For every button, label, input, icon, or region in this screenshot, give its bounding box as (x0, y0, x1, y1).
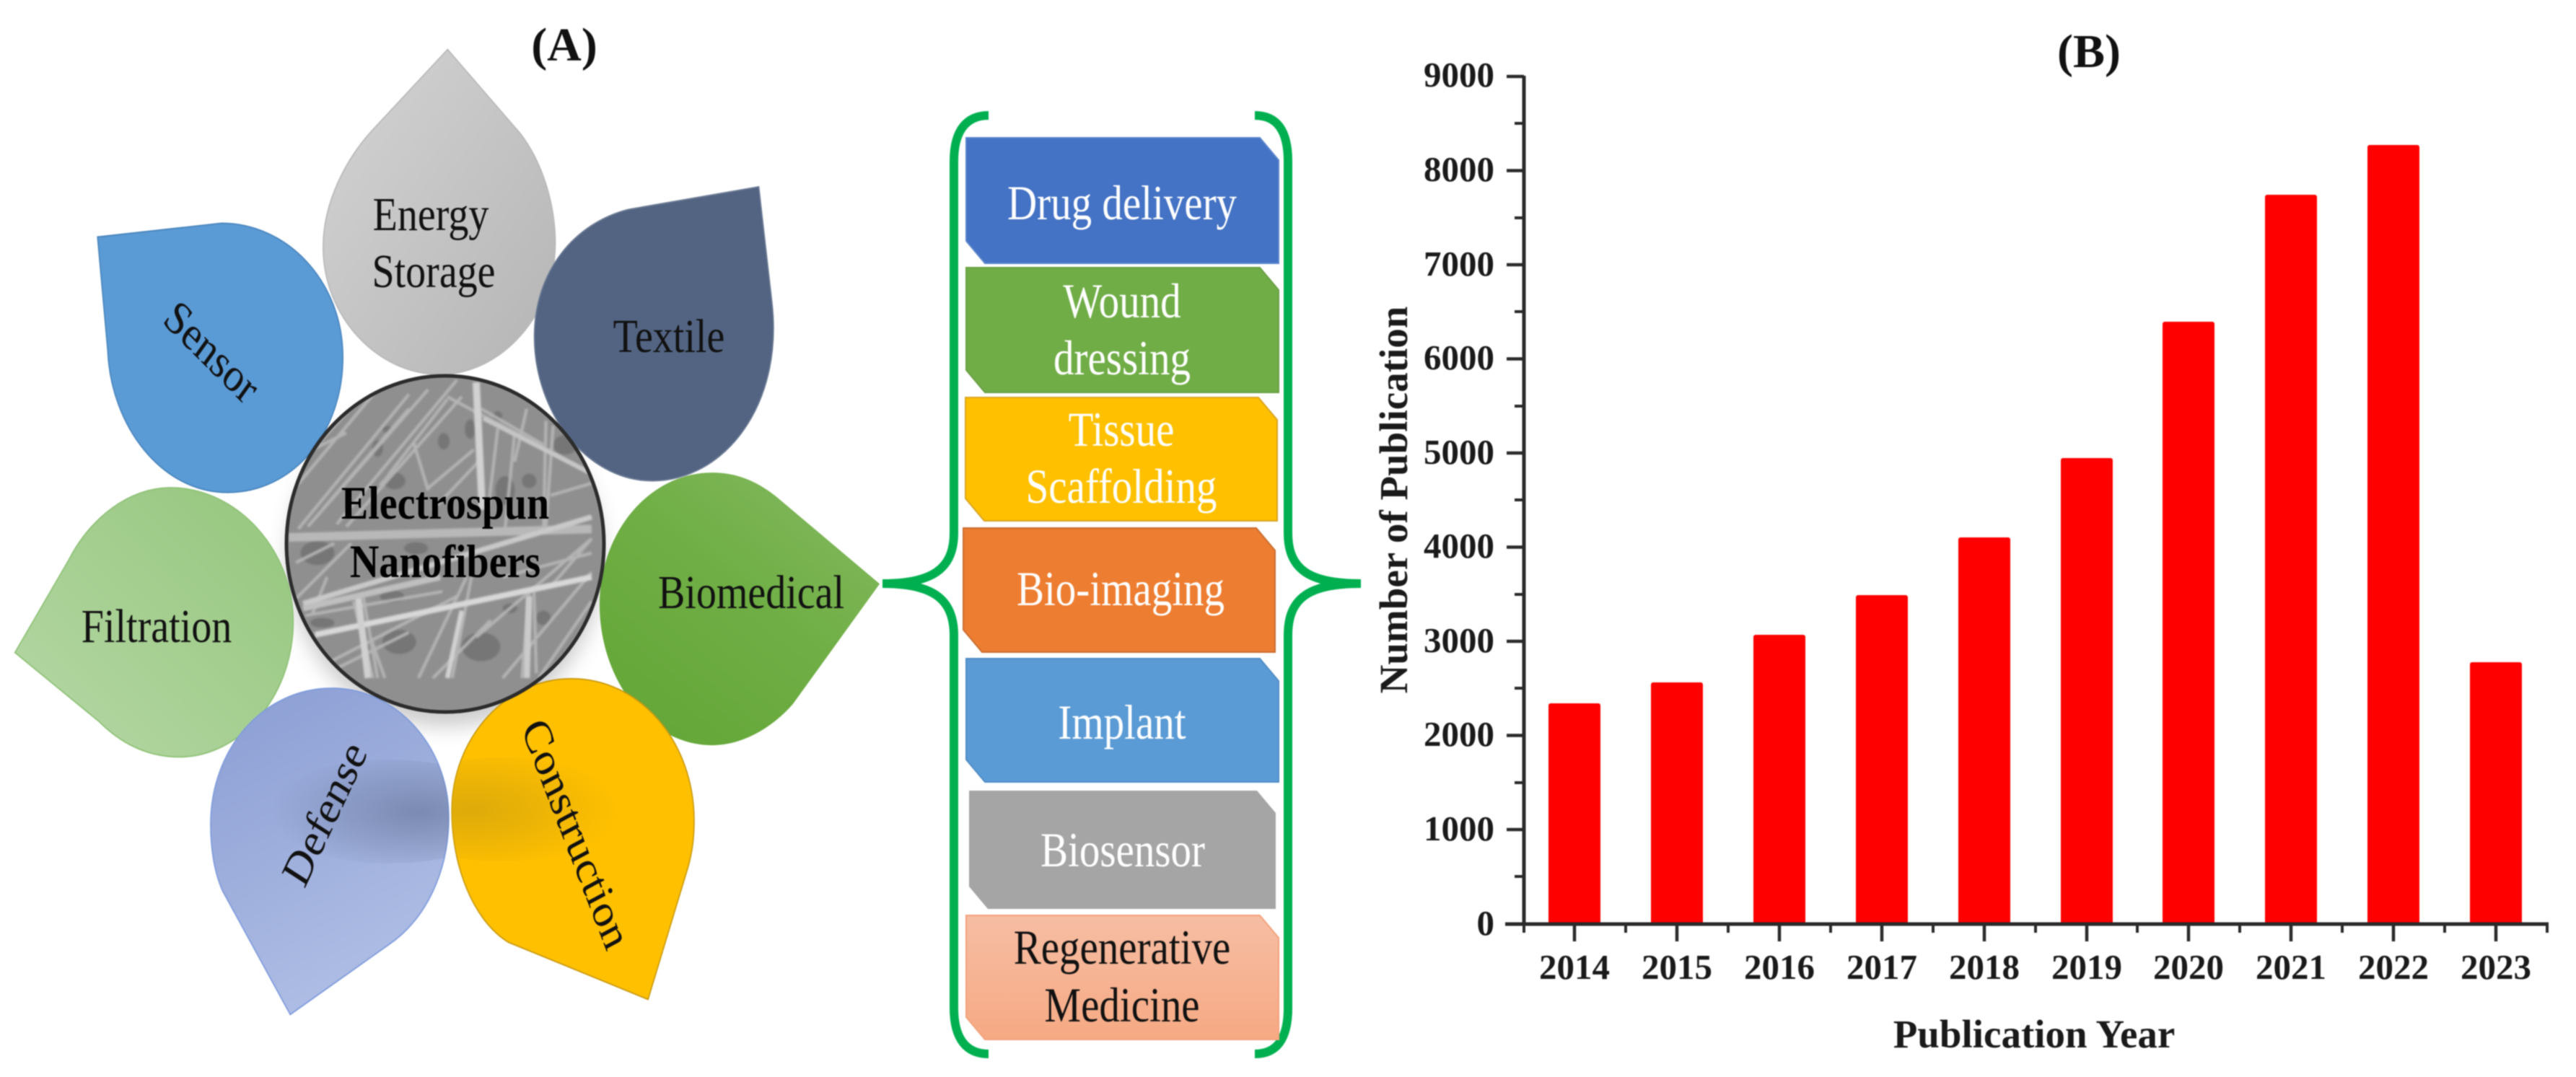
x axis tick labels: 2020 (2153, 947, 2224, 987)
box: Biosensor (969, 791, 1276, 909)
left curly brace connector (882, 115, 989, 1054)
center circle: nanofiber micrograph: Nanofibers (350, 536, 540, 588)
petal: Sensor: Sensor (155, 290, 268, 414)
x axis tick labels: 2014 (1539, 947, 1610, 987)
box: Wound dressing: Wound (1063, 275, 1181, 328)
box: Biosensor: Biosensor (1041, 824, 1205, 877)
x axis tick labels: 2021 (2256, 947, 2326, 987)
y axis tick labels: 8000 (1424, 149, 1494, 189)
y axis tick labels: 7000 (1424, 244, 1494, 283)
petal: Energy Storage (323, 50, 556, 374)
petal: Biomedical (600, 472, 880, 745)
petal: Defense: Defense (273, 732, 376, 894)
box: Regenerative Medicine: Medicine (1044, 979, 1200, 1032)
y axis tick labels: 2000 (1424, 714, 1494, 754)
petal: Defense (209, 687, 450, 1016)
petal: Filtration (15, 488, 293, 757)
box: Wound dressing (966, 268, 1279, 392)
right curly brace connector (1255, 115, 1361, 1054)
soft shadow below center circle (288, 392, 603, 726)
box: Bio-imaging: Bio-imaging (1017, 563, 1225, 616)
panel label (B): (B) (2057, 25, 2121, 78)
axes and tick marks (1505, 76, 2549, 941)
x axis tick labels: 2019 (2051, 947, 2122, 987)
petal: Textile: Textile (613, 310, 724, 363)
box: Wound dressing: dressing (1053, 332, 1191, 385)
petal: Construction (450, 677, 696, 1001)
box: Tissue Scaffolding: Tissue (1069, 403, 1174, 457)
center circle: nanofiber micrograph (286, 375, 605, 713)
x axis tick labels: 2023 (2461, 947, 2531, 987)
y axis tick labels: 9000 (1424, 55, 1494, 94)
y axis tick labels: 6000 (1424, 338, 1494, 377)
box: Implant (966, 659, 1279, 782)
box: Tissue Scaffolding: Scaffolding (1026, 460, 1217, 514)
y axis tick labels: 3000 (1424, 620, 1494, 660)
petal: Energy Storage: Storage (372, 245, 496, 298)
box: Regenerative Medicine: Regenerative (1014, 921, 1230, 975)
box: Tissue Scaffolding (965, 397, 1277, 521)
panel label (A): (A) (531, 19, 597, 71)
box: Regenerative Medicine (966, 915, 1279, 1039)
box: Drug delivery: Drug delivery (1007, 177, 1237, 230)
petal: Textile (535, 187, 774, 481)
y axis tick labels: 1000 (1424, 809, 1494, 848)
box: Bio-imaging (963, 528, 1275, 652)
x axis tick labels: 2015 (1642, 947, 1712, 987)
bars (1548, 145, 2522, 924)
x axis tick labels: 2018 (1949, 947, 2020, 987)
x axis title: Publication Year (1893, 1012, 2175, 1056)
y axis tick labels: 5000 (1424, 432, 1494, 472)
petal: Filtration: Filtration (82, 600, 232, 653)
x axis tick labels: 2022 (2358, 947, 2429, 987)
petal: Biomedical: Biomedical (658, 566, 844, 619)
x axis tick labels (1539, 947, 2531, 987)
petal: Construction: Construction (512, 711, 639, 957)
y axis title: Number of Publication (1372, 307, 1416, 693)
y axis tick labels (1424, 55, 1494, 943)
center circle: nanofiber micrograph: Electrospun (341, 478, 549, 529)
y axis tick labels: 4000 (1424, 526, 1494, 566)
y axis tick labels: 0 (1476, 903, 1494, 943)
x axis tick labels: 2016 (1744, 947, 1815, 987)
x axis tick labels: 2017 (1846, 947, 1917, 987)
box: Implant: Implant (1058, 696, 1186, 749)
petal: Sensor (97, 223, 343, 493)
box: Drug delivery (966, 138, 1279, 263)
petal: Energy Storage: Energy (373, 188, 489, 241)
bar chart: publications per year (1372, 55, 2549, 1056)
